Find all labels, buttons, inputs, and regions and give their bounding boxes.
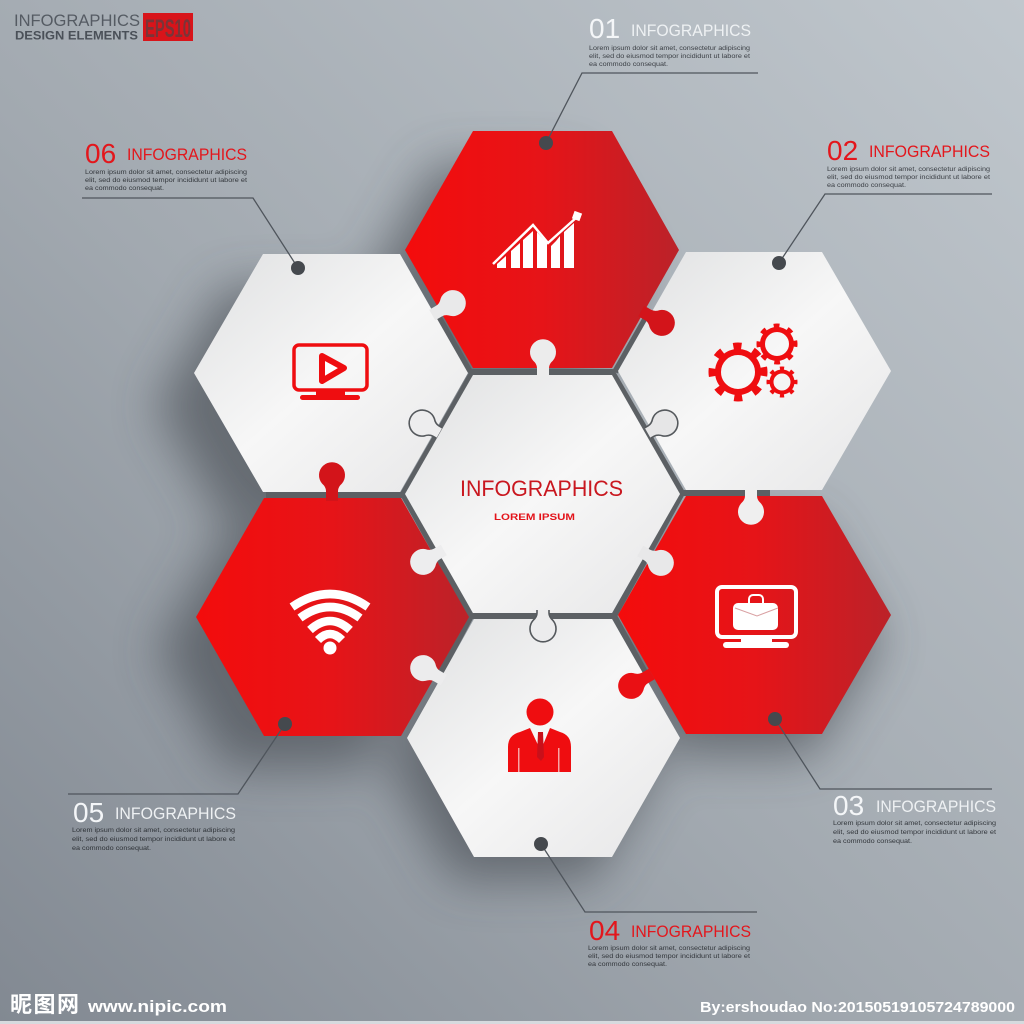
callout 02: INFOGRAPHICS [869,142,990,161]
callout 03: elit, sed do eiusmod tempor incididunt ut labore et [833,829,996,836]
callout 05: 05 [73,797,104,828]
icon: wifi [292,594,368,654]
callout 06: Lorem ipsum dolor sit amet, consectetur adipiscing [85,169,247,176]
callout 01: Lorem ipsum dolor sit amet, consectetur adipiscing [589,45,750,52]
callout 05: elit, sed do eiusmod tempor incididunt ut labore et [72,836,235,843]
bottom edge strip [0,1021,1024,1024]
seams between pieces [266,316,770,674]
hexagon: lower right [618,496,891,734]
center title: LOREM IPSUM [494,512,575,523]
drop shadows [156,164,881,880]
callout 06: INFOGRAPHICS [127,145,247,164]
callout 01: elit, sed do eiusmod tempor incididunt ut labore et [589,53,750,60]
watermark right: By:ershoudao No:20150519105724789000 [700,999,1015,1016]
callout 06: elit, sed do eiusmod tempor incididunt ut labore et [85,177,247,184]
callout 05 [72,797,236,852]
callout 06: ea commodo consequat. [85,185,164,192]
callout 03: Lorem ipsum dolor sit amet, consectetur adipiscing [833,820,997,827]
callout 04: 04 [589,915,620,946]
hexagon: bottom [407,619,680,857]
center title: INFOGRAPHICS [460,476,623,501]
callout 05: ea commodo consequat. [72,845,151,852]
callout 04: ea commodo consequat. [588,961,667,968]
callout 02: 02 [827,135,858,166]
icon: rising bar chart [493,211,582,268]
callout 01: INFOGRAPHICS [631,21,751,40]
connector dots [278,136,786,851]
connector lines [68,73,992,912]
header logo: DESIGN ELEMENTS [15,28,138,42]
callout 04: Lorem ipsum dolor sit amet, consectetur adipiscing [588,945,750,952]
callout 03: ea commodo consequat. [833,838,912,845]
watermark left: 昵图网 [10,987,79,1019]
callout 02: elit, sed do eiusmod tempor incididunt ut labore et [827,174,990,181]
hexagon: center [405,375,680,613]
watermark left: www.nipic.com [87,997,227,1016]
callout 06: 06 [85,138,116,169]
callout 01: ea commodo consequat. [589,61,668,68]
header logo: EPS10 [145,15,191,43]
callout 03: 03 [833,790,864,821]
callout 04: elit, sed do eiusmod tempor incididunt ut labore et [588,953,750,960]
callout 02: Lorem ipsum dolor sit amet, consectetur adipiscing [827,166,991,173]
hexagon: upper right [618,252,891,490]
center title [460,476,623,523]
callout 01 [589,13,751,68]
callout 05: Lorem ipsum dolor sit amet, consectetur adipiscing [72,827,236,834]
callout 03: INFOGRAPHICS [876,797,996,816]
callout 04 [588,915,751,968]
hexagon: top [405,131,679,368]
header logo [14,11,193,43]
honeycomb puzzle [194,131,891,857]
callout 03 [833,790,997,845]
callout 04: INFOGRAPHICS [631,922,751,941]
hexagon: lower left [196,498,469,736]
header logo: INFOGRAPHICS [14,11,140,30]
icon: monitor with briefcase [717,587,796,648]
icon: video monitor [294,345,367,400]
callout 06 [85,138,247,192]
callout 05: INFOGRAPHICS [115,804,236,823]
icon: businessman [508,698,571,772]
callout 01: 01 [589,13,620,44]
puzzle tabs [319,285,764,704]
hexagon: upper left [194,254,468,492]
icon: gears [712,326,795,398]
watermark left [10,987,227,1019]
callout 02 [827,135,991,189]
callout 02: ea commodo consequat. [827,182,906,189]
